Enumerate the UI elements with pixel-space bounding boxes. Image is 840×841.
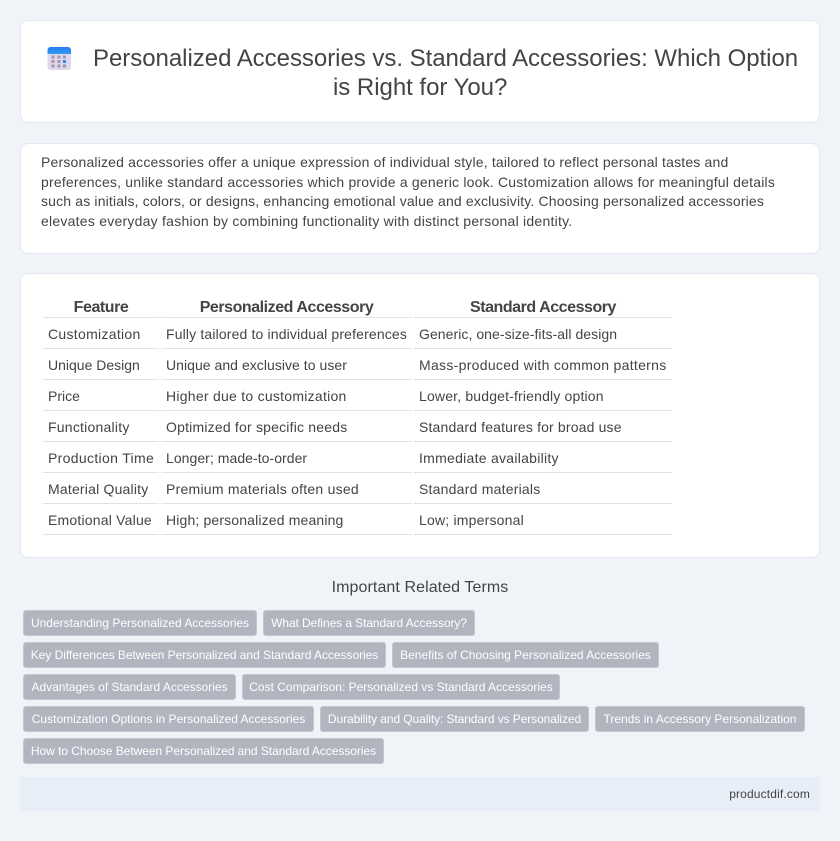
intro text: Personalized accessories offer a unique expression of individual style, tailored to reflect personal tastes and — [41, 154, 728, 170]
icon: calendar — [48, 47, 71, 70]
intro text: such as initials, colors, or designs, enhancing emotional value and exclusivity. Choosing personalized accessories — [41, 193, 764, 209]
panel: header — [20, 20, 820, 123]
title: Personalized Accessories vs. Standard Accessories: Which Option — [93, 45, 798, 72]
footer text: productdif.com — [729, 787, 810, 801]
tags: related terms: Advantages of Standard Accessories — [31, 680, 228, 694]
panel: comparison table: Premium materials often used — [166, 481, 359, 497]
panel: comparison table: Lower, budget-friendly option — [419, 388, 604, 404]
panel: comparison table: Immediate availability — [419, 450, 559, 466]
heading: important related terms: Important Related Terms — [332, 579, 508, 596]
panel: comparison table: Standard features for broad use — [419, 419, 622, 435]
row: price: Price — [48, 388, 80, 404]
panel: comparison table — [20, 273, 820, 558]
tags: related terms: Key Differences Between Personalized and Standard Accessories — [31, 648, 378, 662]
panel: introduction — [20, 143, 820, 254]
tags: related terms: Customization Options in Personalized Accessories — [32, 712, 305, 726]
panel: comparison table: Generic, one-size-fits-all design — [419, 326, 617, 342]
panel: comparison table: Unique and exclusive to user — [166, 357, 347, 373]
panel: comparison table: Longer; made-to-order — [166, 450, 307, 466]
tags: related terms: What Defines a Standard Accessory? — [271, 616, 467, 630]
row: customization: Customization — [48, 326, 141, 342]
panel: comparison table: Standard materials — [419, 481, 540, 497]
panel: comparison table: Mass-produced with common patterns — [419, 357, 667, 373]
footer — [20, 777, 820, 811]
panel: comparison table: Standard Accessory — [470, 299, 616, 316]
panel: comparison table: High; personalized meaning — [166, 512, 343, 528]
row: emotional value: Emotional Value — [48, 512, 152, 528]
panel: comparison table: Personalized Accessory — [200, 299, 373, 316]
panel: comparison table: Higher due to customization — [166, 388, 347, 404]
row: functionality: Functionality — [48, 419, 130, 435]
intro text — [41, 154, 775, 229]
intro text: preferences, unlike standard accessories which provide a generic look. Customization allows for meaningful details — [41, 174, 775, 190]
row: unique design: Unique Design — [48, 357, 140, 373]
intro text: elevates everyday fashion by combining functionality with distinct personal identity. — [41, 213, 572, 229]
panel: comparison table: Optimized for specific needs — [166, 419, 347, 435]
tags: related terms — [23, 610, 805, 764]
panel: comparison table: Low; impersonal — [419, 512, 524, 528]
tags: related terms: Understanding Personalized Accessories — [31, 616, 249, 630]
title: is Right for You? — [333, 74, 507, 101]
tags: related terms: Trends in Accessory Personalization — [604, 712, 796, 726]
table header: Feature — [74, 299, 128, 316]
tags: related terms: Durability and Quality: Standard vs Personalized — [328, 712, 581, 726]
tags: related terms: Benefits of Choosing Personalized Accessories — [400, 648, 651, 662]
title — [93, 45, 798, 101]
row: material quality: Material Quality — [48, 481, 148, 497]
panel: comparison table: Fully tailored to individual preferences — [166, 326, 407, 342]
row: production time: Production Time — [48, 450, 154, 466]
tags: related terms: Cost Comparison: Personalized vs Standard Accessories — [249, 680, 553, 694]
tags: related terms: How to Choose Between Personalized and Standard Accessories — [31, 744, 376, 758]
